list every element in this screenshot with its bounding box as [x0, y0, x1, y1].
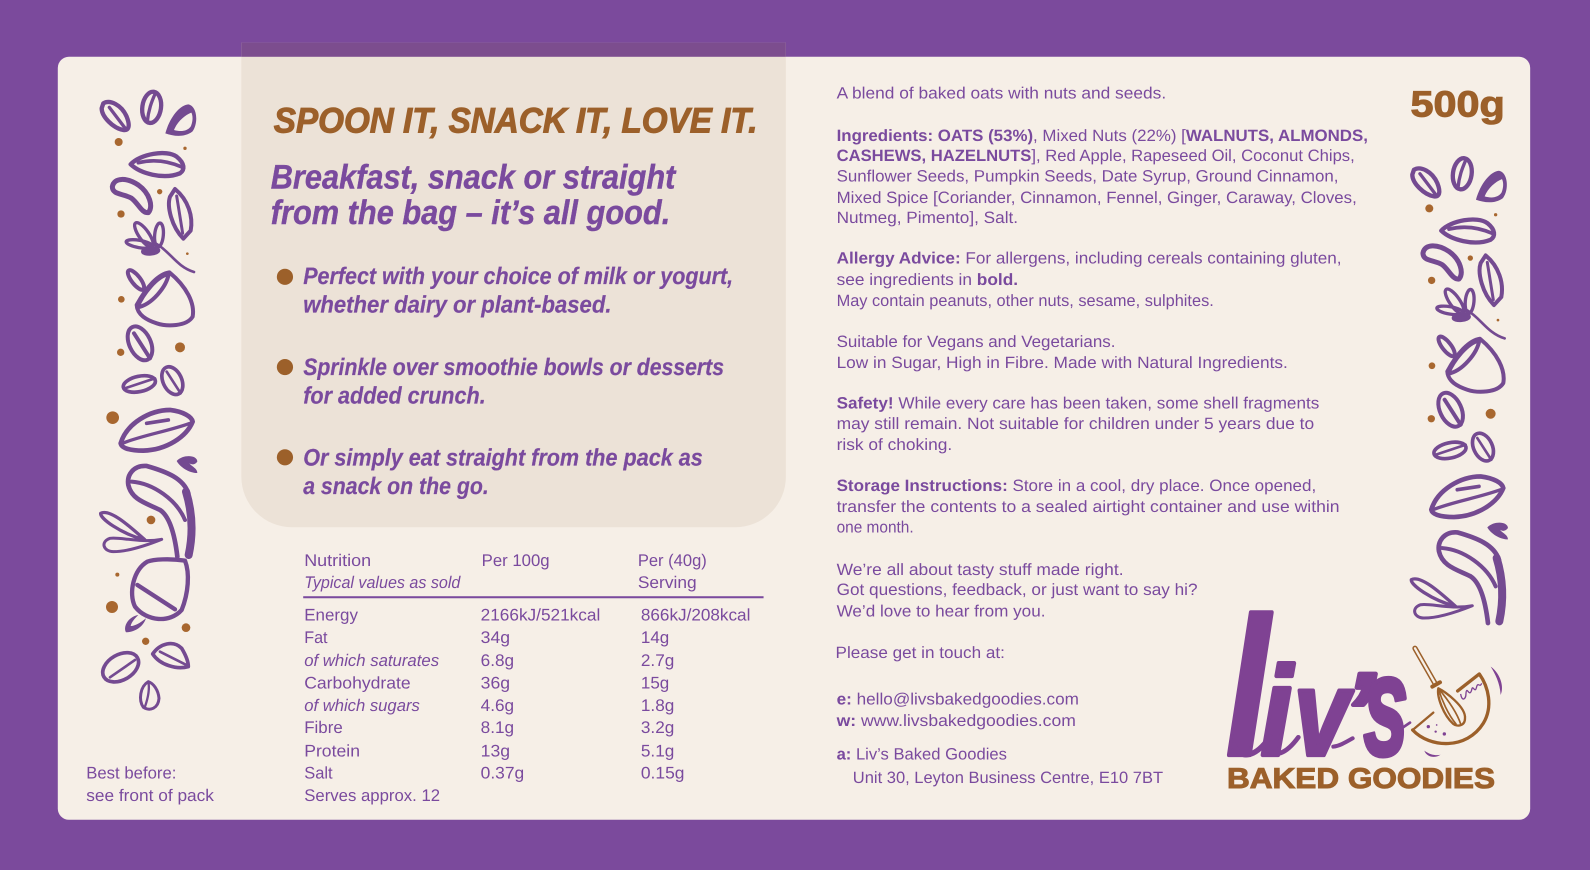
contact details: w: www.livsbakedgoodies.com [835, 712, 1076, 730]
contact details: Unit 30, Leyton Business Centre, E10 7BT [853, 769, 1163, 787]
suitability: Low in Sugar, High in Fibre. Made with Natural Ingredients. [837, 354, 1288, 372]
decorative doodle column: right lower [1411, 476, 1508, 623]
table rows: 14g [641, 628, 669, 647]
intro text: A blend of baked oats with nuts and seeds. [837, 84, 1166, 102]
feedback note [837, 561, 1198, 621]
ingredients: CASHEWS, HAZELNUTS], Red Apple, Rapeseed Oil, Coconut Chips, [837, 147, 1355, 165]
bullet 1: Perfect with your choice of milk or yogurt, [303, 263, 733, 289]
seed 8 [98, 647, 144, 688]
table rows: 13g [481, 741, 510, 760]
table rows: Energy [304, 605, 359, 625]
table rows: 3.2g [641, 718, 674, 737]
table header: Per 100g [482, 551, 550, 570]
safety [837, 394, 1319, 454]
ingredients: Mixed Spice [Coriander, Cinnamon, Fennel, Ginger, Caraway, Cloves, [837, 189, 1357, 207]
safety: may still remain. Not suitable for children under 5 years due to [837, 415, 1314, 433]
table rows: Fat [304, 628, 328, 647]
table rows: 1.8g [641, 696, 674, 715]
swoosh [128, 466, 192, 557]
heart seed [177, 456, 197, 473]
table rows: 2166kJ/521kcal [481, 605, 600, 625]
seed 7 [158, 363, 187, 398]
logo wordmark: l [1226, 577, 1272, 797]
brown dots [115, 138, 189, 356]
bullet 2 [277, 354, 724, 409]
contact details: e: hello@livsbakedgoodies.com [837, 691, 1079, 709]
table rows: Fibre [304, 718, 343, 737]
table rows: 4.6g [481, 696, 514, 715]
suitability: Suitable for Vegans and Vegetarians. [837, 333, 1115, 351]
table rows: of which sugars [304, 696, 420, 715]
decorative doodle column: right upper [1412, 157, 1507, 464]
logo wordmark: v [1294, 645, 1354, 781]
table rows: 34g [481, 628, 510, 647]
allergy advice: see ingredients in bold. [837, 271, 1018, 289]
storage: one month. [837, 518, 914, 536]
bullet 2: for added crunch. [303, 382, 486, 409]
bullet 1: whether dairy or plant-based. [303, 291, 611, 317]
seed 1 [102, 102, 129, 130]
icon: sprinkles [1424, 667, 1502, 757]
table header: Nutrition [304, 551, 371, 570]
bullet 2: Sprinkle over smoothie bowls or desserts [303, 354, 724, 380]
allergy advice: May contain peanuts, other nuts, sesame, sulphites. [837, 292, 1214, 310]
logo subtitle: BAKED GOODIES [1227, 762, 1495, 794]
net weight: 500g [1411, 83, 1505, 125]
ingredients: Sunflower Seeds, Pumpkin Seeds, Date Syrup, Ground Cinnamon, [837, 167, 1339, 186]
seed 10 [141, 682, 159, 709]
panel: serving suggestions background [241, 43, 786, 527]
table rows: 15g [641, 673, 669, 693]
storage [837, 477, 1340, 536]
logo wordmark [1226, 577, 1410, 797]
sprig [126, 220, 194, 272]
decorative doodle column: left middle [101, 410, 197, 557]
subheading [271, 159, 677, 232]
best before note [86, 764, 215, 805]
allergy advice [837, 249, 1342, 310]
bullet list [277, 263, 733, 499]
subheading: Breakfast, snack or straight [271, 159, 677, 197]
best before note: see front of pack [86, 786, 215, 805]
table header: Serving [638, 573, 697, 592]
table rows: 0.15g [641, 764, 684, 783]
brown dots [106, 411, 190, 645]
allergy advice: Allergy Advice: For allergens, including cereals containing gluten, [837, 249, 1342, 268]
bullet 3 [277, 444, 703, 499]
icon: whisk [1415, 648, 1465, 726]
table rows: 8.1g [481, 718, 514, 737]
storage: Storage Instructions: Store in a cool, dry place. Once opened, [837, 477, 1316, 495]
icon: bowl [1413, 674, 1489, 744]
big leaf [121, 410, 193, 451]
table header [303, 551, 764, 598]
contact details [835, 691, 1163, 787]
seed 4 [131, 153, 183, 176]
ingredients [837, 127, 1368, 227]
table rows: Salt [304, 764, 333, 783]
table rows: Serves approx. 12 [304, 786, 440, 805]
contact heading: Please get in touch at: [836, 644, 1005, 662]
safety: Safety! While every care has been taken, some shell fragments [837, 394, 1319, 413]
cashew [112, 179, 151, 213]
best before note: Best before: [86, 764, 176, 783]
bullet 3: Or simply eat straight from the pack as [303, 444, 703, 470]
table header: Typical values as sold [304, 573, 461, 592]
icon: batter squiggle [1461, 683, 1482, 699]
headline: SPOON IT, SNACK IT, LOVE IT. [274, 101, 757, 140]
storage: transfer the contents to a sealed airtight container and use within [837, 498, 1340, 516]
bullet 3: a snack on the go. [303, 473, 489, 499]
logo wordmark: ’ [1343, 650, 1376, 773]
logo wordmark: i [1261, 640, 1294, 782]
feedback note: We’re all about tasty stuff made right. [837, 561, 1124, 579]
subheading: from the bag – it’s all good. [271, 195, 670, 232]
leaf pair [101, 512, 162, 552]
suitability [837, 333, 1288, 372]
table rows: Protein [304, 741, 360, 760]
seed 5 [123, 322, 157, 364]
acorn [125, 268, 193, 325]
seed 3 [165, 104, 196, 136]
logo wordmark: s [1363, 626, 1408, 786]
ingredients: Nutmeg, Pimento], Salt. [837, 209, 1018, 227]
contact details: a: Liv’s Baked Goodies [837, 745, 1007, 764]
table rows: 0.37g [481, 764, 524, 783]
bullet 1 [277, 263, 733, 317]
table rows: 5.1g [641, 741, 674, 760]
seed 2 [140, 91, 163, 124]
long seed [169, 189, 191, 239]
seed 9 [153, 644, 188, 668]
hook [125, 615, 146, 632]
table rows: 2.7g [641, 651, 674, 670]
round nut [132, 559, 188, 619]
decorative doodle column: left upper [102, 91, 196, 398]
decorative doodle column: left lower [98, 411, 190, 709]
feedback note: We’d love to hear from you. [837, 602, 1045, 621]
logo [1226, 577, 1502, 797]
ingredients: Ingredients: OATS (53%) , Mixed Nuts (22%) [ WALNUTS, ALMONDS, [837, 127, 1368, 145]
nutrition table [303, 551, 764, 805]
table header: Per (40g) [638, 551, 707, 570]
safety: risk of choking. [837, 436, 952, 454]
feedback note: Got questions, feedback, or just want to say hi? [837, 581, 1198, 599]
table rows: 866kJ/208kcal [641, 605, 750, 625]
table rows [304, 605, 750, 805]
table rows: of which saturates [304, 651, 439, 670]
table rows: 36g [481, 673, 510, 693]
table rows: 6.8g [481, 651, 514, 670]
table rows: Carbohydrate [304, 673, 411, 693]
seed 6 [122, 373, 157, 395]
